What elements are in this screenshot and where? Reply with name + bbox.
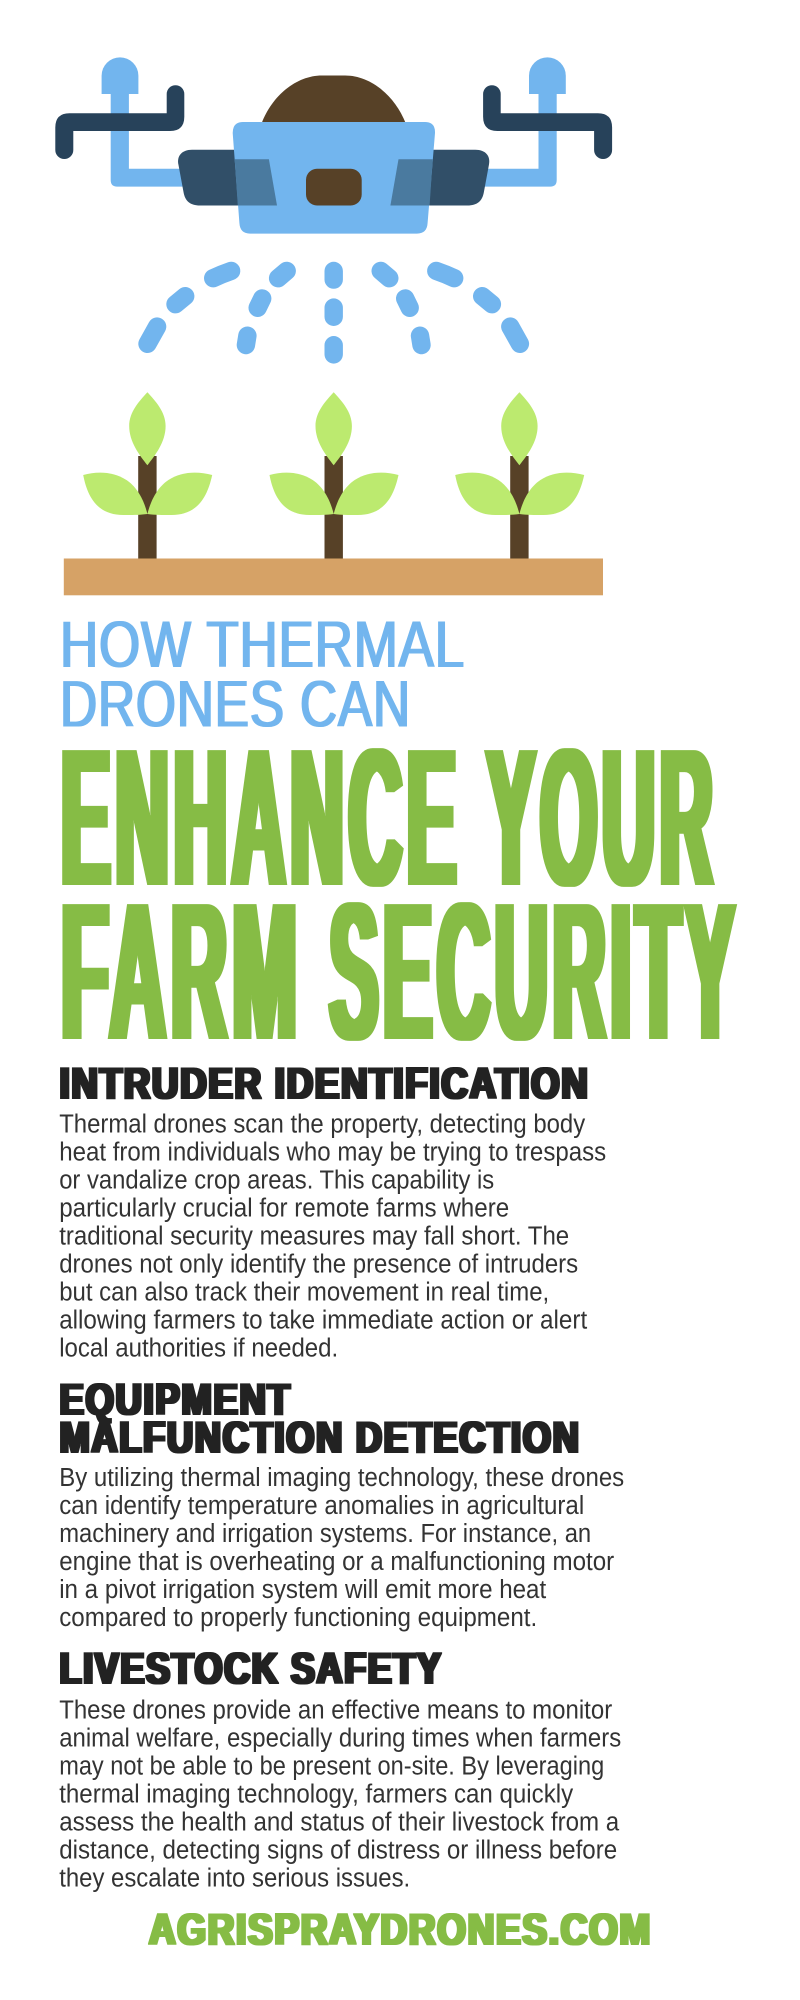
title line: how thermal: HOW THERMAL xyxy=(60,608,465,681)
body text: but can also track their movement in real time, xyxy=(59,1279,549,1307)
body text: or vandalize crop areas. This capability is xyxy=(59,1167,494,1195)
left body shading xyxy=(235,159,277,206)
drone camera xyxy=(306,169,362,206)
footer website: AGRISPRAYDRONES.COM xyxy=(149,1905,652,1954)
body text: allowing farmers to take immediate action or alert xyxy=(59,1307,587,1335)
body text xyxy=(59,1696,621,1892)
title xyxy=(60,608,740,1081)
body text: Thermal drones scan the property, detecting body xyxy=(59,1111,585,1139)
body text: These drones provide an effective means to monitor xyxy=(59,1696,613,1724)
illustration: drone spraying plants xyxy=(55,57,612,595)
body text: drones not only identify the presence of intruders xyxy=(59,1251,578,1279)
plant: left xyxy=(83,392,212,559)
left spray lines xyxy=(148,271,287,345)
body text: machinery and irrigation systems. For instance, an xyxy=(59,1520,591,1548)
body text: traditional security measures may fall short. The xyxy=(59,1223,569,1251)
heading: INTRUDER IDENTIFICATION xyxy=(60,1060,590,1109)
centre spray line xyxy=(325,271,343,354)
body text: By utilizing thermal imaging technology, these drones xyxy=(59,1464,624,1492)
section: livestock safety xyxy=(59,1644,621,1892)
left rotor arm xyxy=(55,57,242,205)
body text: heat from individuals who may be trying to trespass xyxy=(59,1139,606,1167)
body text: thermal imaging technology, farmers can quickly xyxy=(59,1780,573,1808)
body text: particularly crucial for remote farms where xyxy=(59,1195,509,1223)
body text: distance, detecting signs of distress or illness before xyxy=(59,1836,617,1864)
heading xyxy=(60,1375,581,1463)
ground xyxy=(64,558,603,595)
body text: may not be able to be present on-site. By leveraging xyxy=(59,1752,604,1780)
body text: they escalate into serious issues. xyxy=(59,1864,410,1892)
section: equipment malfunction detection xyxy=(59,1375,624,1632)
title: FARM xyxy=(61,862,302,1081)
heading: MALFUNCTION DETECTION xyxy=(60,1414,581,1463)
body text: assess the health and status of their livestock from a xyxy=(59,1808,620,1836)
body text: engine that is overheating or a malfunctioning motor xyxy=(59,1548,615,1576)
body text xyxy=(59,1111,606,1363)
heading: EQUIPMENT xyxy=(60,1375,292,1424)
right body shading xyxy=(390,159,433,206)
drone dome xyxy=(262,76,406,123)
body text: can identify temperature anomalies in agricultural xyxy=(59,1492,584,1520)
heading: LIVESTOCK SAFETY xyxy=(60,1644,443,1693)
plant: right xyxy=(455,392,584,559)
right spray lines xyxy=(381,271,520,345)
section: intruder identification xyxy=(59,1060,606,1363)
body text: compared to properly functioning equipment. xyxy=(59,1604,537,1632)
plant: centre xyxy=(270,392,398,559)
right rotor arm xyxy=(425,57,612,205)
body text: animal welfare, especially during times when farmers xyxy=(59,1724,621,1752)
title line: drones can: DRONES CAN xyxy=(60,668,411,740)
drone body xyxy=(233,122,435,234)
spray droplets xyxy=(148,271,520,354)
icon: drone xyxy=(55,57,612,234)
body text: in a pivot irrigation system will emit more heat xyxy=(59,1576,546,1604)
body text xyxy=(59,1464,624,1632)
body text: local authorities if needed. xyxy=(59,1335,338,1363)
